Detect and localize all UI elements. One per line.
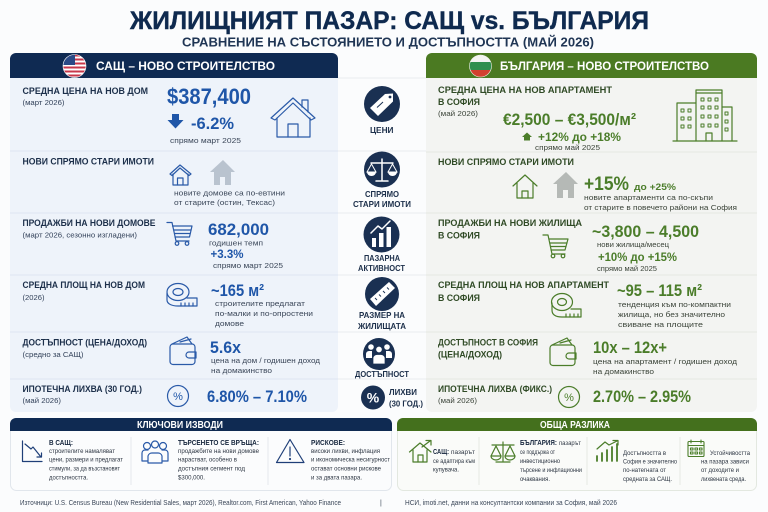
heading: Bulgaria: БЪЛГАРИЯ – НОВО СТРОИТЕЛСТВО bbox=[500, 59, 709, 73]
icon: scales bbox=[364, 152, 400, 188]
icon: Bulgarian flag bbox=[469, 54, 492, 78]
row: Bulgaria affordability: 10x – 12x+ bbox=[593, 339, 667, 357]
takeaway: USA: достъпността. bbox=[49, 474, 88, 482]
icon: percent: % bbox=[173, 391, 183, 403]
takeaway: USA: цени, размери и предлагат bbox=[49, 456, 123, 464]
difference: Bulgaria: очаквания. bbox=[520, 476, 550, 483]
row: Bulgaria mortgage: 2.70% – 2.95% bbox=[593, 388, 691, 406]
row: Bulgaria mortgage bbox=[438, 384, 691, 408]
difference: Bulgaria: търсене и инфлационни bbox=[520, 467, 582, 474]
icon: US flag bbox=[63, 54, 86, 78]
difference: stability: от доходите и bbox=[701, 467, 740, 474]
row: Bulgaria new vs old: до +25% bbox=[634, 182, 677, 193]
row: Bulgaria new vs old: НОВИ СПРЯМО СТАРИ ИМОТИ bbox=[438, 157, 574, 167]
takeaway: risks: и за двата пазара. bbox=[311, 474, 362, 482]
difference: stability bbox=[688, 440, 751, 483]
icon: market chart bbox=[364, 216, 400, 252]
row: Bulgaria price: В СОФИЯ bbox=[438, 97, 480, 107]
row: Bulgaria price bbox=[438, 85, 737, 152]
icon: wallet bbox=[170, 337, 196, 364]
central column bbox=[338, 78, 426, 410]
takeaway: USA: В САЩ: bbox=[49, 440, 73, 447]
takeaway: USA bbox=[22, 440, 123, 482]
icon: house with arrow bbox=[410, 440, 431, 462]
panel: key takeaways bbox=[10, 418, 392, 490]
row: Bulgaria new vs old: новите апартаменти са по-скъпи bbox=[584, 193, 713, 202]
sources footer: Източници: U.S. Census Bureau (New Residential Sales, март 2026), Realtor.com, First American, Yahoo Finance bbox=[20, 500, 341, 507]
row: USA mortgage: 6.80% – 7.10% bbox=[207, 388, 307, 406]
heading: key takeaways: КЛЮЧОВИ ИЗВОДИ bbox=[137, 420, 223, 431]
row: Bulgaria price: €2,500 – €3,500/м² bbox=[503, 111, 636, 129]
row: USA area bbox=[22, 280, 313, 328]
takeaway: demand: $300,000. bbox=[178, 474, 205, 482]
row: USA new vs old: новите домове са по-евтини bbox=[174, 188, 285, 198]
takeaway: risks: остават основни рискове bbox=[311, 466, 382, 472]
icon: tape measure bbox=[167, 284, 197, 306]
takeaway: risks: високи лихви, инфлация bbox=[311, 448, 380, 455]
icon: percent: % bbox=[367, 390, 380, 406]
row: USA new vs old: от старите (остин, Тексас) bbox=[174, 198, 276, 207]
icon: old house bbox=[210, 160, 235, 185]
icon: people bbox=[363, 338, 395, 370]
difference: USA: пазарът bbox=[451, 449, 475, 456]
row: USA area: СРЕДНА ПЛОЩ НА НОВ ДОМ bbox=[22, 280, 145, 290]
row: Bulgaria area: свиване на площите bbox=[618, 320, 703, 329]
icon: percent bbox=[361, 386, 385, 410]
icon: old apartment house bbox=[553, 172, 578, 198]
row: Bulgaria sales: +10% до +15% bbox=[598, 252, 677, 264]
row: USA affordability bbox=[22, 337, 321, 375]
row: USA affordability: ДОСТЪПНОСТ (ЦЕНА/ДОХОД) bbox=[22, 338, 147, 348]
row: Bulgaria area: ~95 – 115 м² bbox=[617, 281, 702, 300]
row: USA sales: годишен темп bbox=[209, 238, 263, 248]
difference: Bulgaria: БЪЛГАРИЯ: bbox=[520, 440, 557, 447]
icon: scales bbox=[491, 442, 515, 462]
icon: people bbox=[142, 441, 168, 463]
takeaway: demand: достъпния сегмент под bbox=[178, 466, 245, 472]
sources footer: НСИ, imoti.net, данни на консултантски компании за София, май 2026 bbox=[405, 499, 617, 507]
row: USA price: $387,400 bbox=[167, 84, 251, 109]
icon: price tag bbox=[364, 86, 400, 122]
difference: affordability: средната за САЩ. bbox=[623, 476, 672, 483]
difference: Bulgaria: се поддържа от bbox=[520, 449, 555, 456]
row: Bulgaria sales: ~3,800 – 4,500 bbox=[592, 222, 699, 241]
row: USA sales: спрямо март 2025 bbox=[213, 261, 283, 270]
label: rates: ЛИХВИ bbox=[389, 387, 417, 397]
icon: wallet bbox=[550, 338, 576, 366]
icon: rising chart bbox=[597, 440, 618, 461]
row: Bulgaria sales: В СОФИЯ bbox=[438, 230, 480, 240]
panel: USA bbox=[10, 53, 338, 412]
takeaway: risks bbox=[276, 440, 390, 482]
row: Bulgaria affordability bbox=[438, 338, 738, 376]
row: USA price: (март 2026) bbox=[22, 100, 64, 107]
difference: affordability: Достъпността в bbox=[623, 450, 667, 457]
row: Bulgaria affordability: на домакинство bbox=[593, 367, 654, 376]
row: Bulgaria mortgage: (май 2026) bbox=[438, 396, 477, 405]
panel: Bulgaria bbox=[426, 53, 757, 412]
row: Bulgaria area: СРЕДНА ПЛОЩ НА НОВ АПАРТАМЕНТ bbox=[438, 280, 610, 290]
row: Bulgaria new vs old bbox=[438, 157, 737, 212]
row: USA price: спрямо март 2025 bbox=[170, 136, 241, 145]
row: USA price: СРЕДНА ЦЕНА НА НОВ ДОМ bbox=[22, 86, 148, 96]
row: Bulgaria affordability: (ЦЕНА/ДОХОД) bbox=[438, 350, 502, 360]
row: USA mortgage: ИПОТЕЧНА ЛИХВА (30 ГОД.) bbox=[22, 384, 142, 394]
row: Bulgaria area: В СОФИЯ bbox=[438, 293, 480, 303]
label: new vs old bbox=[353, 189, 411, 209]
difference: affordability: по-натегната от bbox=[623, 467, 666, 474]
icon: warning bbox=[276, 440, 304, 462]
icon: cart bbox=[167, 222, 192, 245]
label: size: ЖИЛИЩАТА bbox=[357, 321, 406, 331]
label: size: РАЗМЕР НА bbox=[359, 310, 405, 320]
icon: cart bbox=[543, 235, 568, 258]
row: USA area: строителите предлагат bbox=[215, 299, 306, 308]
takeaway: risks: и икономическа несигурност bbox=[311, 456, 390, 464]
row: Bulgaria mortgage: ИПОТЕЧНА ЛИХВА (ФИКС.) bbox=[438, 384, 552, 394]
takeaway: demand: продажбите на нови домове bbox=[178, 448, 260, 455]
difference: Bulgaria: пазарът bbox=[559, 440, 581, 447]
difference: USA: се адаптира към bbox=[433, 458, 475, 465]
row: USA sales: (март 2026, сезонно изгладени) bbox=[22, 232, 137, 240]
row: USA price: -6.2% bbox=[191, 115, 234, 133]
difference: USA bbox=[410, 440, 475, 474]
panel: overall difference bbox=[397, 418, 757, 490]
label: rates bbox=[389, 387, 423, 408]
label: rates: (30 ГОД.) bbox=[389, 398, 423, 408]
takeaway: demand: нарастват, особено в bbox=[178, 456, 238, 464]
row: Bulgaria price: СРЕДНА ЦЕНА НА НОВ АПАРТАМЕНТ bbox=[438, 85, 613, 95]
row: USA area: по-малки и по-опростени bbox=[215, 309, 313, 318]
row: Bulgaria price: +12% до +18% bbox=[538, 132, 621, 144]
title: ЖИЛИЩНИЯТ ПАЗАР: САЩ vs. БЪЛГАРИЯ bbox=[129, 7, 649, 35]
icon: percent: % bbox=[564, 392, 574, 404]
heading: USA: САЩ – НОВО СТРОИТЕЛСТВО bbox=[96, 59, 275, 73]
heading: overall difference: ОБЩА РАЗЛИКА bbox=[540, 420, 610, 431]
row: USA area: ~165 м² bbox=[211, 281, 264, 300]
row: USA new vs old: НОВИ СПРЯМО СТАРИ ИМОТИ bbox=[22, 156, 154, 166]
row: USA affordability: 5.6x bbox=[210, 339, 242, 357]
sources footer: | bbox=[380, 500, 382, 507]
row: Bulgaria affordability: цена на апартамент / годишен доход bbox=[593, 357, 738, 366]
row: Bulgaria affordability: ДОСТЪПНОСТ В СОФИЯ bbox=[438, 338, 538, 348]
icon: tape measure bbox=[552, 294, 581, 317]
icon: calendar bbox=[688, 440, 704, 456]
difference: stability: Устойчивостта bbox=[710, 450, 751, 457]
icon: percent bbox=[168, 386, 188, 406]
takeaway: demand: ТЪРСЕНЕТО СЕ ВРЪЩА: bbox=[178, 440, 259, 447]
label: affordability: ДОСТЪПНОСТ bbox=[355, 369, 410, 379]
label: market activity bbox=[358, 253, 406, 273]
difference: Bulgaria: инвестиционно bbox=[520, 458, 561, 465]
row: Bulgaria area: жилища, но без значително bbox=[618, 310, 725, 319]
row: USA sales: ПРОДАЖБИ НА НОВИ ДОМОВЕ bbox=[22, 218, 156, 228]
row: USA price bbox=[22, 84, 315, 145]
difference: stability: на пазара зависи bbox=[701, 458, 750, 466]
row: Bulgaria sales: спрямо май 2025 bbox=[597, 264, 657, 273]
row: USA affordability: на домакинство bbox=[211, 366, 272, 375]
row: USA sales: 682,000 bbox=[208, 220, 269, 239]
row: USA sales: +3.3% bbox=[210, 249, 244, 261]
label: prices: ЦЕНИ bbox=[370, 125, 394, 135]
icon: new house bbox=[170, 165, 191, 185]
icon: new apartment house bbox=[513, 175, 537, 198]
icon: house bbox=[271, 98, 315, 137]
row: Bulgaria price: (май 2026) bbox=[438, 109, 478, 118]
row: Bulgaria area: тенденция към по-компактни bbox=[618, 300, 731, 309]
difference: affordability bbox=[597, 440, 677, 483]
row: USA area: (2026) bbox=[22, 295, 44, 302]
difference: USA: САЩ: bbox=[433, 449, 449, 456]
icon: buildings bbox=[673, 90, 737, 141]
sources footer bbox=[20, 499, 617, 507]
takeaway: USA: строителите намаляват bbox=[49, 448, 115, 455]
difference: affordability: София е значително bbox=[623, 458, 677, 466]
label: new vs old: СПРЯМО bbox=[365, 189, 399, 199]
label: size bbox=[357, 310, 406, 331]
label: market activity: ПАЗАРНА bbox=[364, 253, 400, 263]
row: USA mortgage bbox=[22, 384, 307, 406]
subtitle: СРАВНЕНИЕ НА СЪСТОЯНИЕТО И ДОСТЪПНОСТТА (МАЙ 2026) bbox=[182, 34, 594, 50]
row: Bulgaria sales: нови жилища/месец bbox=[597, 240, 669, 249]
difference: USA: купувача. bbox=[433, 466, 459, 474]
icon: ruler bbox=[365, 277, 399, 311]
icon: falling trend bbox=[22, 441, 42, 462]
difference: Bulgaria bbox=[491, 440, 582, 483]
row: Bulgaria sales: ПРОДАЖБИ НА НОВИ ЖИЛИЩА bbox=[438, 218, 583, 228]
row: Bulgaria area bbox=[438, 280, 731, 329]
row: Bulgaria sales bbox=[438, 218, 699, 273]
label: market activity: АКТИВНОСТ bbox=[358, 263, 406, 273]
label: new vs old: СТАРИ ИМОТИ bbox=[353, 199, 411, 209]
row: USA affordability: (средно за САЩ) bbox=[22, 352, 84, 359]
takeaway: risks: РИСКОВЕ: bbox=[311, 440, 345, 447]
takeaway: demand bbox=[142, 440, 260, 482]
difference: stability: лихвената среда. bbox=[701, 476, 746, 483]
takeaway: USA: стимули, за да възстановят bbox=[49, 466, 120, 472]
row: USA mortgage: (май 2026) bbox=[22, 397, 61, 405]
row: USA new vs old bbox=[22, 156, 285, 207]
row: USA sales bbox=[22, 218, 283, 270]
row: Bulgaria new vs old: +15% bbox=[584, 174, 629, 195]
row: USA affordability: цена на дом / годишен доход bbox=[211, 356, 321, 365]
row: Bulgaria price: спрямо май 2025 bbox=[535, 143, 600, 152]
icon: percent bbox=[558, 386, 580, 408]
row: Bulgaria new vs old: от старите в повечето райони на София bbox=[584, 203, 737, 212]
row: USA area: домове bbox=[215, 319, 244, 328]
